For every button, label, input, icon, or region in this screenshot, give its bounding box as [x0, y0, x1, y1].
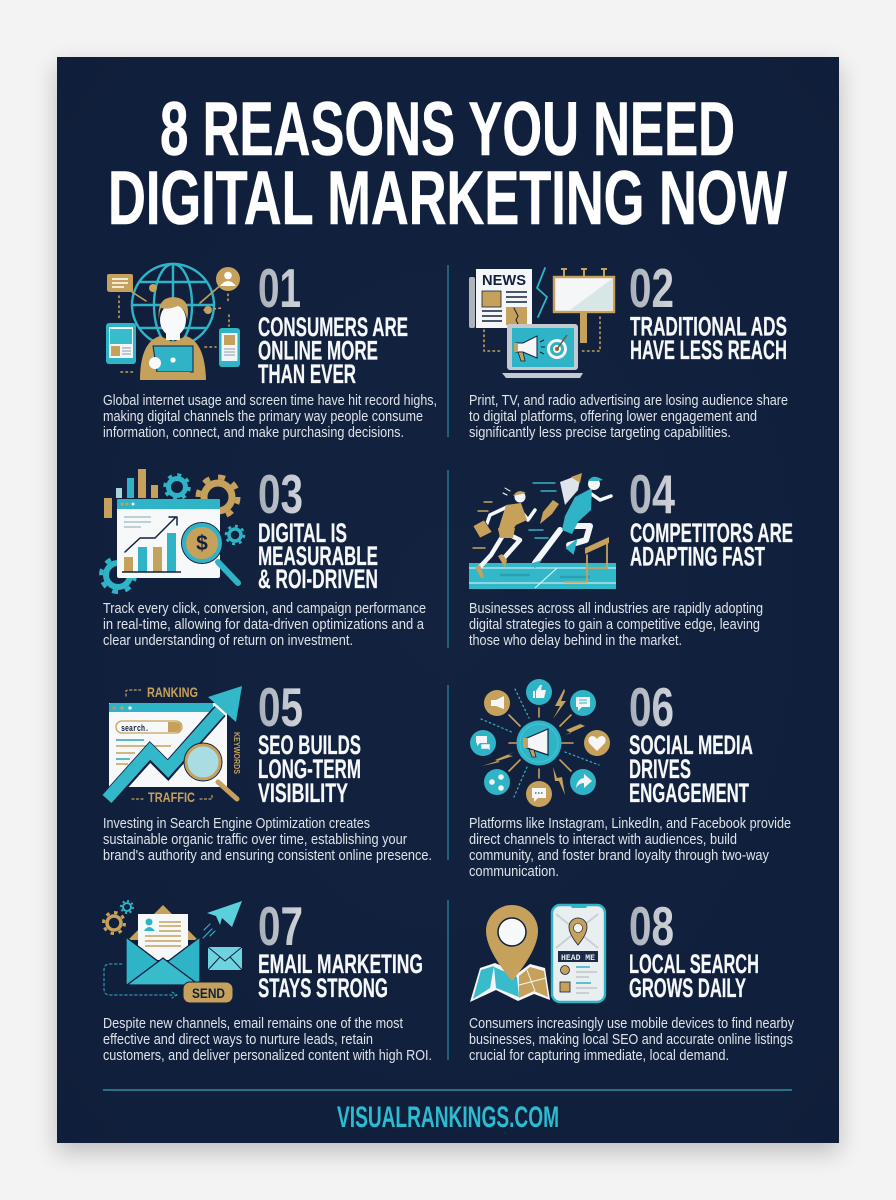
- icon: newspaper, billboard and laptop: NEWS: [482, 273, 526, 289]
- icon: SEO window, rising arrow and magnifier: RANKING: [147, 684, 198, 700]
- body text 08: [469, 1016, 795, 1064]
- icon: SEO window, rising arrow and magnifier: [107, 684, 242, 805]
- body text 05: brand's authority and ensuring consistent online presence.: [103, 848, 432, 864]
- heading 07: [258, 949, 423, 1003]
- rocket runner: [535, 493, 611, 563]
- body text 02: significantly less precise targeting capabilities.: [469, 425, 731, 441]
- heading 05: VISIBILITY: [258, 778, 348, 808]
- heading 01: CONSUMERS ARE: [258, 312, 408, 342]
- body text 06: community, and foster brand loyalty through two-way: [469, 848, 770, 864]
- panel: reason 05: [103, 677, 432, 864]
- icon: SEO window, rising arrow and magnifier: TRAFFIC: [148, 789, 195, 805]
- heading 08: GROWS DAILY: [629, 973, 746, 1003]
- icon: newspaper, billboard and laptop: [469, 268, 614, 378]
- heading 04: COMPETITORS ARE: [630, 518, 793, 548]
- body text 03: [103, 601, 426, 649]
- body text 05: Investing in Search Engine Optimization creates: [103, 816, 370, 832]
- icon: runners and hurdle: [469, 473, 616, 589]
- panel: reason 06: [469, 677, 791, 880]
- body text 04: digital strategies to gain a competitive edge, leaving: [469, 617, 760, 633]
- heading 04: [630, 518, 793, 572]
- heading 02: [630, 312, 787, 365]
- body text 01: making digital channels the primary way people consume: [103, 409, 423, 425]
- body text 04: [469, 601, 763, 649]
- icon: map pin and phone: HEAD ME: [561, 953, 595, 963]
- heading 05: LONG-TERM: [258, 754, 361, 784]
- heading 06: ENGAGEMENT: [629, 778, 749, 808]
- number 05: 05: [258, 677, 303, 738]
- body text 05: sustainable organic traffic over time, establishing your: [103, 832, 407, 848]
- icon: SEO window, rising arrow and magnifier: search.: [121, 723, 149, 734]
- body text 01: [103, 393, 437, 441]
- icon: email envelope with send button: [104, 901, 242, 1003]
- title: [108, 87, 787, 241]
- panel: reason 07: [103, 896, 432, 1064]
- heading 06: DRIVES: [629, 754, 691, 784]
- number 07: 07: [258, 896, 303, 957]
- body text 08: crucial for capturing immediate, local demand.: [469, 1048, 729, 1064]
- heading 02: TRADITIONAL ADS: [630, 312, 787, 342]
- body text 06: direct channels to interact with audiences, build: [469, 832, 737, 848]
- body text 02: [469, 393, 788, 441]
- body text 03: Track every click, conversion, and campaign performance: [103, 601, 426, 617]
- heading 06: SOCIAL MEDIA: [629, 730, 753, 760]
- number 06: 06: [629, 677, 674, 738]
- body text 07: Despite new channels, email remains one of the most: [103, 1016, 403, 1032]
- body text 01: Global internet usage and screen time have hit record highs,: [103, 393, 437, 409]
- heading 01: [258, 312, 408, 389]
- body text 03: in real-time, allowing for data-driven optimizations and a: [103, 617, 425, 633]
- panel: reason 01: [103, 258, 437, 441]
- heading 01: ONLINE MORE: [258, 336, 378, 366]
- heading 08: LOCAL SEARCH: [629, 949, 759, 979]
- icon: analytics dashboard with gears and magnifier: $: [196, 532, 208, 555]
- icon: SEO window, rising arrow and magnifier: KEYWORDS: [232, 732, 242, 774]
- poster background panel: [57, 57, 839, 1143]
- heading 06: [629, 730, 753, 808]
- body text 03: clear understanding of return on investment.: [103, 633, 353, 649]
- number 08: 08: [629, 896, 674, 957]
- body text 08: Consumers increasingly use mobile devices to find nearby: [469, 1016, 795, 1032]
- body text 02: Print, TV, and radio advertising are losing audience share: [469, 393, 788, 409]
- heading 07: EMAIL MARKETING: [258, 949, 423, 979]
- body text 07: customers, and deliver personalized content with high ROI.: [103, 1048, 432, 1064]
- panel: reason 04: [469, 464, 793, 649]
- body text 06: [469, 816, 791, 880]
- heading 02: HAVE LESS REACH: [630, 335, 787, 365]
- icon: email envelope with send button: SEND: [192, 985, 225, 1001]
- number 03: 03: [258, 464, 303, 525]
- heading 03: & ROI-DRIVEN: [258, 564, 378, 594]
- body text 02: to digital platforms, offering lower engagement and: [469, 409, 757, 425]
- icon: social media hub: [470, 679, 610, 807]
- heading 03: MEASURABLE: [258, 541, 378, 571]
- footer website: VISUALRANKINGS.COM: [337, 1101, 559, 1134]
- icon: analytics dashboard with gears and magnifier: [101, 469, 244, 592]
- heading 01: THAN EVER: [258, 359, 356, 389]
- body text 08: businesses, making local SEO and accurate online listings: [469, 1032, 793, 1048]
- icon: map pin and phone: [470, 905, 605, 1002]
- number 04: 04: [629, 464, 676, 525]
- number 02: 02: [629, 258, 674, 319]
- body text 06: communication.: [469, 864, 559, 880]
- heading 05: [258, 730, 361, 808]
- body text 07: [103, 1016, 432, 1064]
- body text 06: Platforms like Instagram, LinkedIn, and Facebook provide: [469, 816, 791, 832]
- businessman: [479, 507, 535, 568]
- heading 08: [629, 949, 759, 1003]
- body text 05: [103, 816, 432, 864]
- heading 05: SEO BUILDS: [258, 730, 361, 760]
- heading 07: STAYS STRONG: [258, 973, 388, 1003]
- body text 04: those who delay behind in the market.: [469, 633, 682, 649]
- panel: reason 02: [469, 258, 788, 441]
- body text 07: effective and direct ways to nurture leads, retain: [103, 1032, 373, 1048]
- panel: reason 03: [101, 464, 426, 649]
- body text 04: Businesses across all industries are rapidly adopting: [469, 601, 763, 617]
- heading 03: DIGITAL IS: [258, 518, 347, 548]
- number 01: 01: [258, 258, 301, 319]
- panel: reason 08: [469, 896, 795, 1064]
- icon: person with laptop and globe: [106, 264, 240, 380]
- heading 04: ADAPTING FAST: [630, 542, 765, 572]
- heading 03: [258, 518, 378, 594]
- body text 01: information, connect, and make purchasing decisions.: [103, 425, 404, 441]
